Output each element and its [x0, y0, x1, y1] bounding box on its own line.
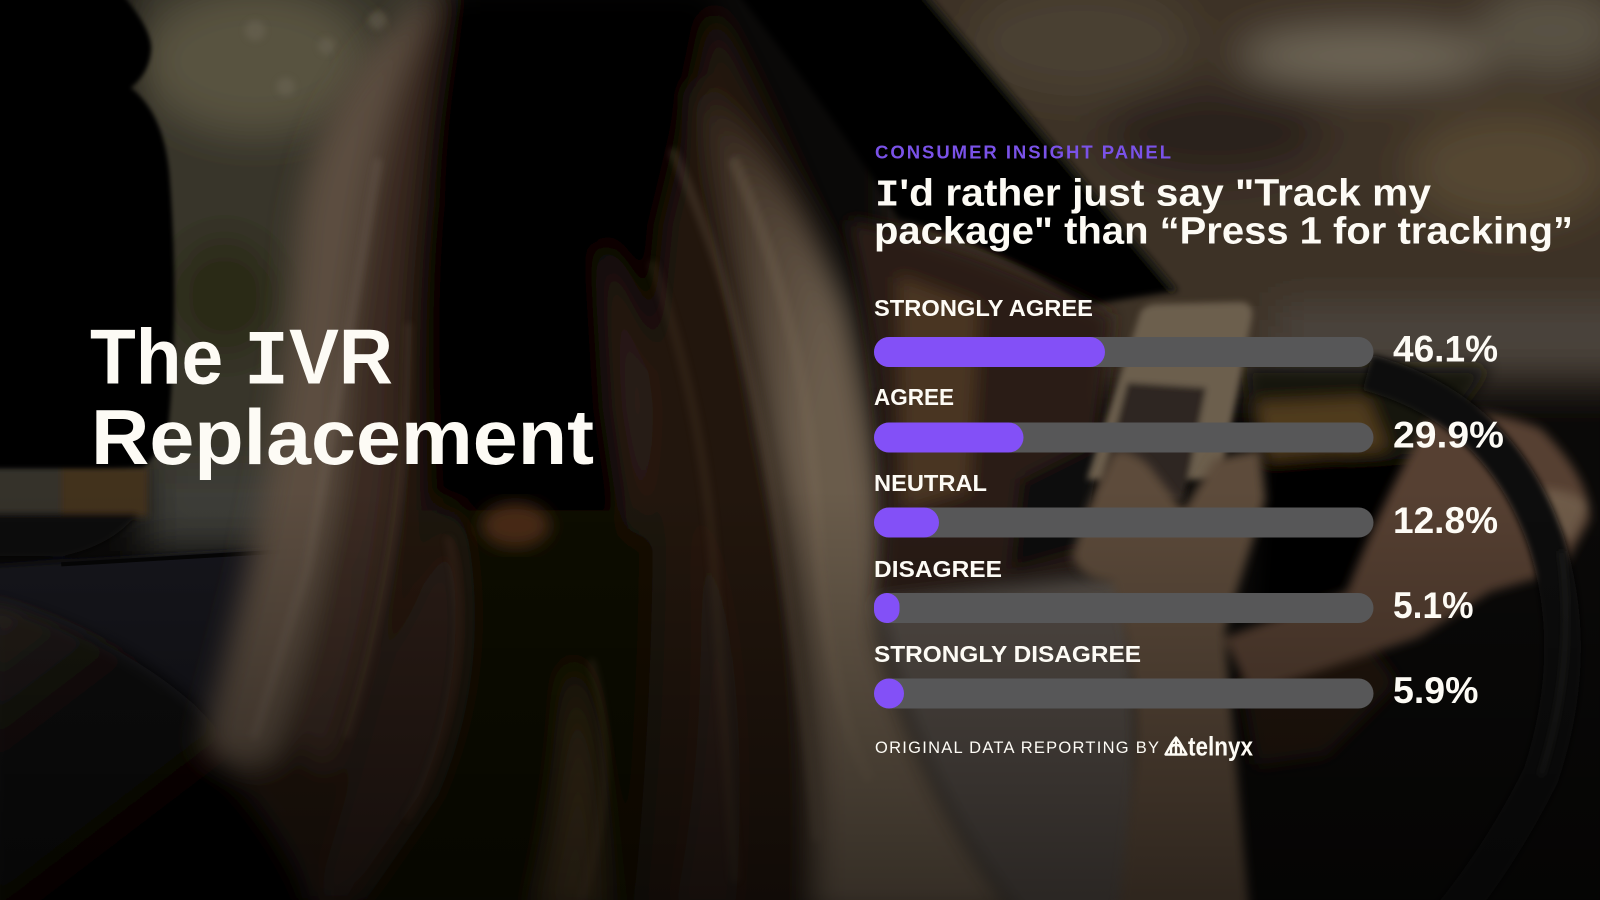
- footer attribution: ORIGINAL DATA REPORTING BY: [875, 739, 1159, 757]
- row: strongly agree 46.1%: STRONGLY AGREE: [874, 295, 1093, 321]
- row: agree 29.9%: AGREE: [874, 384, 954, 410]
- row: disagree 5.1%: [874, 556, 1474, 626]
- steering wheel: [1367, 372, 1563, 900]
- bar chart: survey responses: [874, 295, 1504, 711]
- seat headrest: [0, 0, 174, 467]
- row: neutral 12.8%: [874, 470, 1498, 541]
- window pillar: [735, 0, 1179, 306]
- row: neutral 12.8%: NEUTRAL: [874, 470, 987, 496]
- bokeh lights: [245, 11, 387, 96]
- row: strongly disagree 5.9%: STRONGLY DISAGREE: [874, 641, 1141, 667]
- hair: [199, 0, 1031, 900]
- phone: [1087, 302, 1252, 500]
- title: Replacement: [91, 393, 594, 481]
- row: agree 29.9%: 29.9%: [1393, 414, 1504, 456]
- survey question heading: [874, 172, 1573, 252]
- title: The IVR: [90, 312, 393, 408]
- passenger shoulder: [0, 602, 327, 900]
- telnyx wordmark: telnyx: [1188, 732, 1253, 762]
- row: neutral 12.8%: 12.8%: [1393, 500, 1498, 541]
- car door and side interior: [0, 467, 337, 900]
- row: disagree 5.1%: 5.1%: [1393, 585, 1474, 626]
- title: [90, 312, 594, 481]
- footer attribution: [875, 732, 1253, 762]
- eyebrow: consumer insight panel: CONSUMER INSIGHT PANEL: [875, 142, 1171, 162]
- row: strongly disagree 5.9%: [874, 641, 1478, 711]
- row: agree 29.9%: [874, 384, 1504, 456]
- hair strands: [255, 153, 867, 898]
- row: strongly agree 46.1%: 46.1%: [1393, 328, 1498, 370]
- survey question heading: package" than “Press 1 for tracking”: [874, 210, 1573, 252]
- icon: telnyx logo mark: [1166, 738, 1186, 754]
- survey question heading: I'd rather just say "Track my: [875, 172, 1431, 218]
- row: disagree 5.1%: DISAGREE: [874, 556, 1002, 582]
- row: strongly disagree 5.9%: 5.9%: [1393, 670, 1478, 711]
- hands and arm: [1071, 413, 1590, 900]
- dashboard interior: [847, 219, 1490, 900]
- warm highlight in hair: [481, 503, 550, 548]
- row: strongly agree 46.1%: [874, 295, 1498, 370]
